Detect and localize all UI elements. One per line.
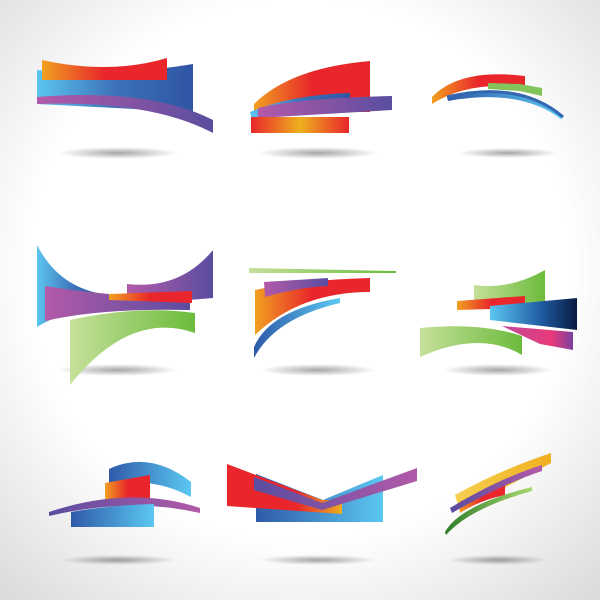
logo 5 bbox=[249, 268, 396, 376]
logo 9 bbox=[445, 453, 551, 565]
logo 2 bbox=[250, 61, 392, 159]
logo 3 bbox=[432, 74, 563, 158]
logo 6 bbox=[420, 270, 577, 376]
logo 7 bbox=[49, 462, 200, 565]
logo 1 bbox=[37, 58, 213, 159]
logo 4 bbox=[37, 245, 213, 385]
logo 8 bbox=[227, 464, 417, 565]
